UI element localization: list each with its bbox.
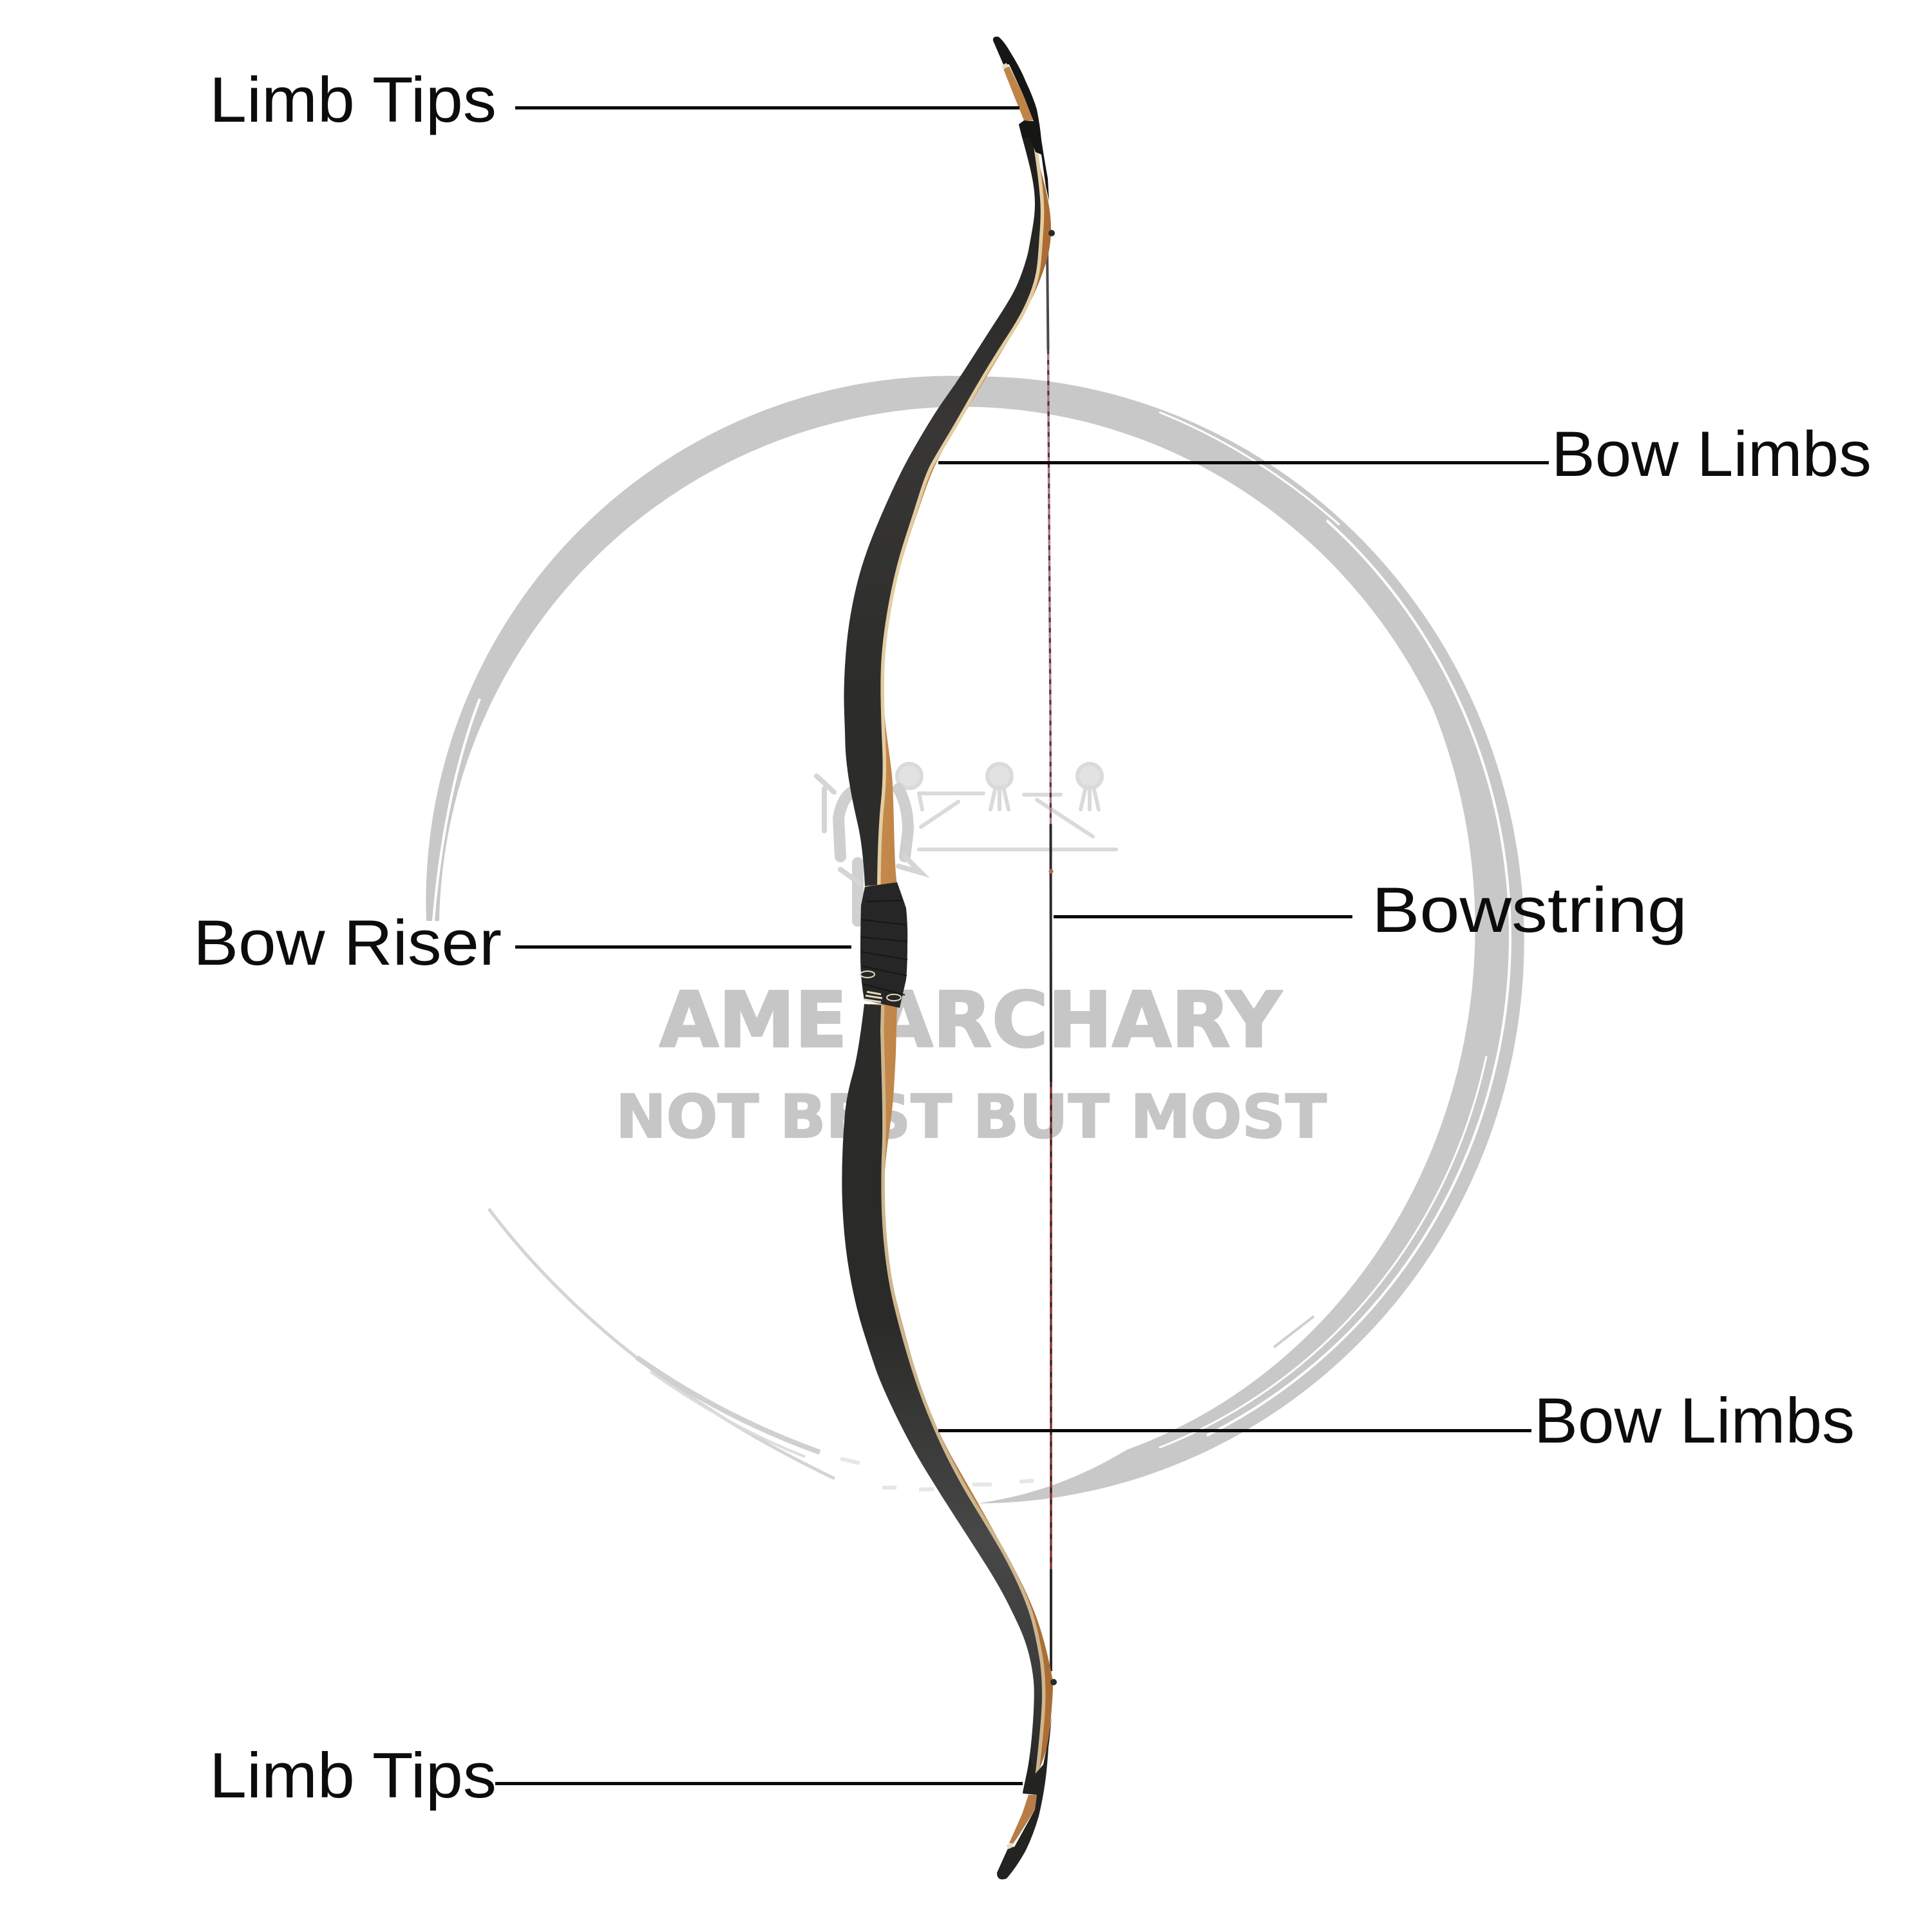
label: Bow Limbs upper: Bow Limbs [1551,418,1871,489]
upper cream laminate [877,146,1041,885]
label: Bow Riser: Bow Riser [193,907,502,978]
upper limb black [844,124,1041,886]
upper nock [1001,63,1009,70]
upper limb wood [869,150,1051,886]
lower limb black [842,1004,1042,1792]
label: Limb Tips bottom: Limb Tips [209,1739,497,1811]
watermark: AME ARCHARY: AME ARCHARY [659,976,1283,1065]
bow [842,37,1057,1879]
label line: bow limbs upper [938,461,1549,464]
watermark: NOT BEST BUT MOST: NOT BEST BUT MOST [616,1082,1327,1151]
label line: limb tips top [515,106,1019,109]
label line: bow riser [515,945,851,949]
wrap logos [860,971,901,1002]
lower cream laminate [880,1005,1042,1777]
lower tip black [997,1716,1052,1879]
lower nock [1007,1842,1014,1849]
label line: bow limbs lower [938,1429,1531,1432]
lower limb wood [869,1004,1053,1776]
upper tip black [993,37,1049,201]
label: Bow Limbs lower: Bow Limbs [1534,1385,1855,1456]
label line: limb tips bottom [495,1782,1023,1785]
watermark: archer pictogram and targets [817,764,1116,921]
lower tip wood [1009,1795,1037,1844]
label line: bowstring [1054,915,1352,918]
upper tip wood [1003,66,1034,120]
upper string bump [1048,230,1055,236]
watermark: brush circle [426,376,1524,1503]
label: Bowstring: Bowstring [1372,874,1687,945]
riser leather wrap [860,882,907,1008]
bowstring [1047,248,1054,1671]
lower string bump [1050,1679,1057,1685]
label: Limb Tips top: Limb Tips [209,64,497,135]
